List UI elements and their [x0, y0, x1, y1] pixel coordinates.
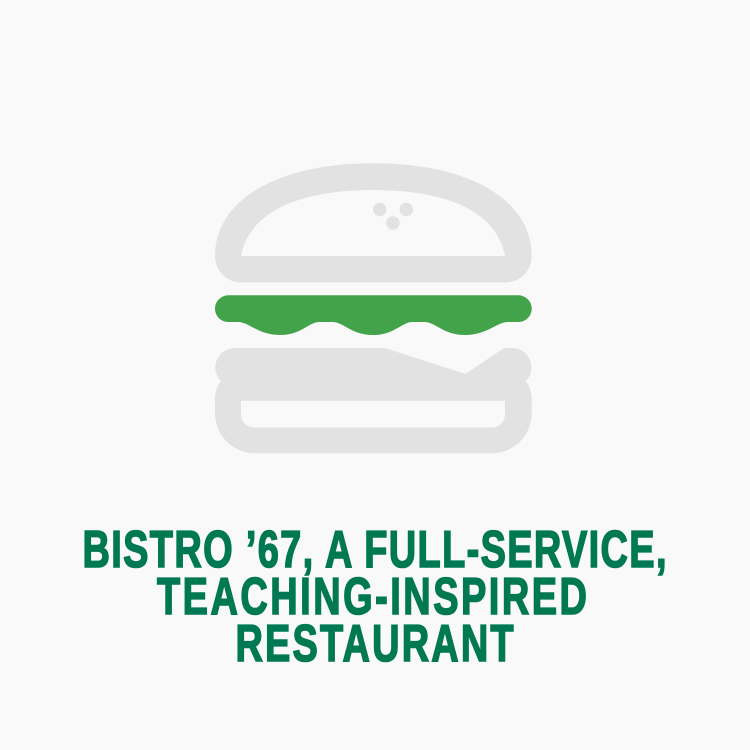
title: BISTRO ’67, A FULL-SERVICE,	[82, 520, 667, 578]
patty and bottom bun	[215, 348, 532, 453]
title: TEACHING-INSPIRED	[157, 567, 587, 625]
title: RESTAURANT	[236, 614, 514, 672]
sesame seeds	[373, 203, 413, 230]
title	[82, 520, 666, 672]
top bun	[215, 163, 532, 282]
icon: burger	[215, 163, 532, 453]
lettuce	[215, 295, 532, 335]
